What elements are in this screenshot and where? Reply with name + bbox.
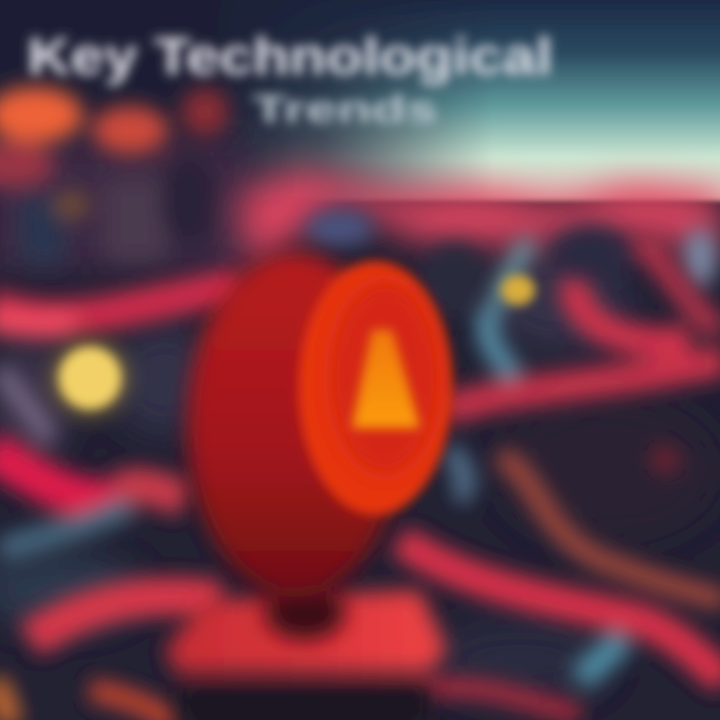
panel: right ribbons [400,240,720,715]
panel: left ribbons [0,285,240,720]
panel: ridge shadows [306,210,716,318]
icon: red alert beacon [187,253,452,640]
panel: pink mountain ridge [235,170,720,270]
panel: distant city on the left [0,87,250,270]
panel: red pedestal base [165,590,447,720]
title: Key Technological [28,28,552,86]
beacon body [187,253,403,597]
icon: warning triangle [352,330,420,428]
beacon stem [265,584,345,640]
icon: small yellow light [501,275,535,305]
panel: sky background [0,0,720,200]
icon: yellow glowing orb [50,338,130,418]
beacon front face [298,261,452,515]
title [28,28,552,131]
beacon inner ring [330,281,440,475]
title: Trends [252,89,438,131]
